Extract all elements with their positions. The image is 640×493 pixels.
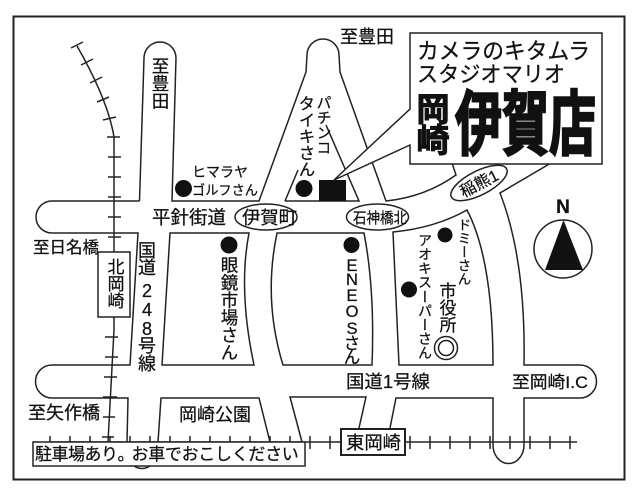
label: Okazaki Park: 岡崎公園 xyxy=(179,405,251,425)
marker: Aoki Super: アオキスーパーさん xyxy=(417,233,433,360)
station: Higashi-Okazaki: 東岡崎 xyxy=(346,433,401,453)
label: to Yahagibashi: 至矢作橋 xyxy=(28,403,100,423)
marker: city hall: 市役所 xyxy=(436,282,456,333)
label: to Toyota (road): 至豊田 xyxy=(150,57,170,110)
label: Route 248: 国道248号線 xyxy=(138,241,156,374)
marker: Himalaya Golf: ゴルフさん xyxy=(192,182,258,198)
marker: Himalaya Golf xyxy=(175,164,258,198)
store brand name: スタジオマリオ xyxy=(417,62,565,87)
store callout xyxy=(334,33,602,180)
label: to Okazaki IC: 至岡崎I.C xyxy=(512,373,588,392)
store area name: 崎 xyxy=(416,122,450,159)
parking note: 駐車場あり。お車でおこしください xyxy=(35,445,299,464)
intersection: Ishigami-bashi Kita: 石神橋北 xyxy=(353,210,407,227)
intersection: Igacho: 伊賀町 xyxy=(242,208,297,228)
store area name xyxy=(416,91,450,159)
station: Kita-Okazaki xyxy=(98,252,130,317)
marker: Pachinko Taiki: パチンコ xyxy=(314,95,332,155)
label: to Himenabashi: 至日名橋 xyxy=(33,238,100,257)
store brand name: カメラのキタムラ xyxy=(417,39,590,64)
store brand name xyxy=(417,39,590,87)
marker: Pachinko Taiki: タイキさん xyxy=(296,95,314,178)
marker: Domy xyxy=(438,218,470,286)
station: Kita-Okazaki: 北岡崎 xyxy=(104,258,124,309)
marker: Megane Ichiba: 眼鏡市場さん xyxy=(219,256,239,361)
intersection: Igacho xyxy=(235,204,297,230)
store branch name: 伊賀店 xyxy=(455,85,596,164)
marker: Domy: ドミーさん xyxy=(456,218,470,286)
intersection: Inaguma 1: 稲熊1 xyxy=(457,167,502,201)
marker: city hall xyxy=(434,282,458,360)
north-south railway xyxy=(71,42,121,442)
marker: Aoki Super xyxy=(401,233,433,360)
intersection: Ishigami-bashi Kita xyxy=(346,204,408,230)
compass xyxy=(534,197,592,278)
station: Higashi-Okazaki xyxy=(341,429,405,455)
label: to Toyota (top): 至豊田 xyxy=(340,27,394,47)
east-west railway xyxy=(50,436,577,449)
marker: Himalaya Golf: ヒマラヤ xyxy=(192,164,248,180)
compass: N xyxy=(556,197,570,218)
label: Route 1: 国道1号線 xyxy=(346,372,430,392)
store location marker xyxy=(319,180,346,201)
marker: ENEOS: ENEOSさん xyxy=(344,257,360,367)
road network xyxy=(36,39,596,468)
intersection: Inaguma 1 xyxy=(446,158,512,208)
marker: Pachinko Taiki xyxy=(296,95,332,197)
label: Hirabari Kaido: 平針街道 xyxy=(152,207,226,228)
store area name: 岡 xyxy=(416,91,450,128)
